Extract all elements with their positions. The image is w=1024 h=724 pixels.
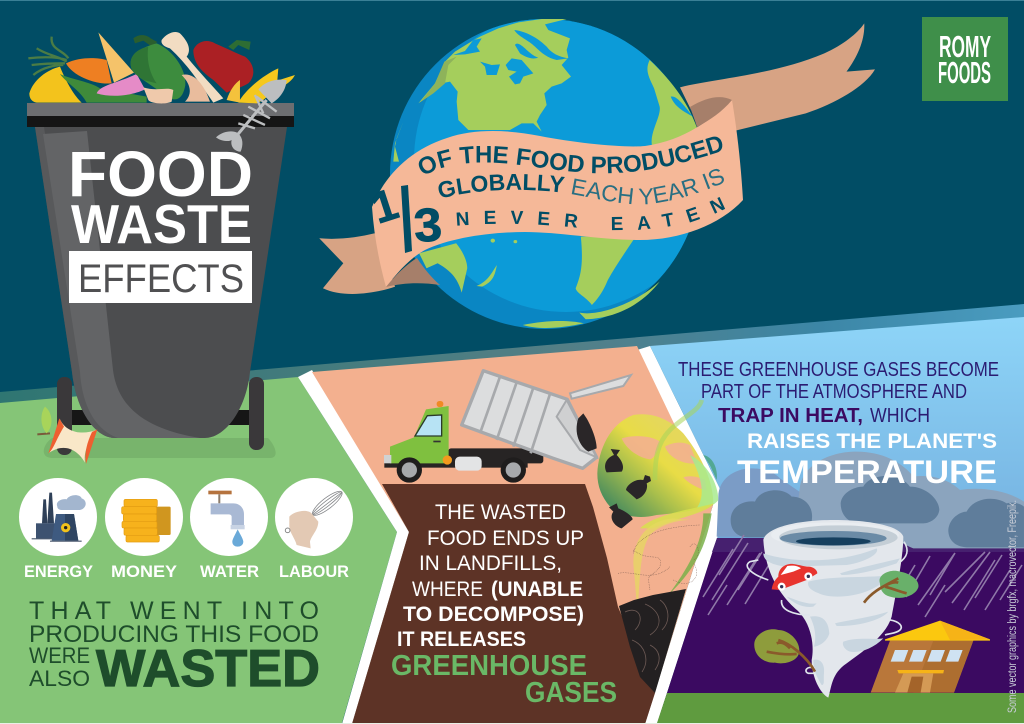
green ground (657, 693, 1024, 723)
ribbon headline: GLOBALLY EACH YEAR IS (438, 168, 724, 204)
icon: labour whisk (275, 478, 353, 556)
icon: olive tree (754, 629, 815, 672)
text: landfill statement: GREENHOUSE (391, 650, 587, 682)
bin lid (27, 103, 294, 116)
credit line: Some vector graphics by brgfx, macrovector, Freepik. (1007, 500, 1019, 713)
icon: house (871, 621, 990, 693)
red pepper (228, 40, 251, 50)
text: landfill statement: IT RELEASES (397, 628, 526, 651)
text: wasted statement: WASTED (96, 640, 320, 698)
truck fuel tank (455, 457, 482, 471)
icon: energy plant (19, 478, 97, 556)
bin body (35, 127, 287, 438)
carrot stems (28, 37, 68, 75)
garbage heap (619, 589, 686, 693)
text: wasted statement: THAT WENT INTO (29, 597, 319, 625)
north america (393, 19, 571, 162)
green pepper (133, 35, 157, 47)
ribbon fraction 1/3: 3 (412, 197, 444, 252)
purple rain field (657, 538, 1024, 724)
title: food waste (68, 138, 253, 255)
falling garbage bags (605, 449, 651, 528)
wheelie bin (27, 103, 294, 458)
text: landfill statement: THE WASTED (435, 501, 566, 524)
bin shadow (44, 438, 276, 458)
bin axle (68, 410, 258, 425)
text: landfill statement: (UNABLE (491, 578, 583, 601)
text: landfill statement: FOOD ENDS UP (427, 527, 584, 550)
text: wasted statement: PRODUCING THIS FOOD (29, 621, 319, 648)
icon labels: MONEY (111, 562, 178, 581)
text: wasted statement: ALSO (29, 666, 90, 691)
smell gas cloud (597, 400, 718, 528)
icon: money coins (105, 478, 183, 556)
landfill flies trails (618, 525, 700, 590)
text: atmosphere statement: RAISES THE PLANET'S (747, 430, 997, 453)
ribbon headline: OF THE FOOD PRODUCED (418, 136, 722, 174)
other continents (419, 60, 698, 328)
apple core (37, 407, 97, 464)
lettuce (60, 74, 147, 103)
text: landfill statement: TO DECOMPOSE) (403, 603, 584, 626)
icon labels: WATER (200, 562, 259, 581)
panel: green resources wasted (0, 377, 397, 723)
container flap (570, 375, 631, 399)
text: landfill statement (391, 501, 617, 709)
tornado scene (747, 520, 990, 698)
icon: water tap (190, 478, 268, 556)
bag leaving container (577, 413, 597, 452)
globe (390, 8, 718, 329)
icon labels: LABOUR (279, 562, 349, 581)
ribbon headline (418, 136, 726, 230)
tornado funnel (763, 520, 903, 698)
landfill mound (352, 484, 655, 724)
text: atmosphere statement: TRAP IN HEAT, (718, 405, 863, 427)
ice cream cone (98, 32, 134, 83)
fish skeleton (216, 80, 287, 152)
yellow pepper (29, 67, 82, 103)
ribbon folds (690, 97, 732, 127)
icon: red car (772, 564, 817, 591)
text: landfill statement: WHERE (412, 578, 483, 601)
food scraps on bin (28, 32, 295, 152)
logo: Romy Foods (922, 17, 1008, 101)
yellow banana (238, 68, 295, 103)
bin wheels (57, 377, 72, 455)
panel: peach landfill (312, 346, 713, 724)
bone (161, 32, 223, 103)
text: atmosphere statement (678, 359, 999, 490)
rain streaks (703, 535, 1022, 617)
panel: sky weather (650, 317, 1024, 724)
tornado swirls (763, 548, 900, 685)
text: landfill statement: GASES (525, 677, 617, 709)
orange carrot (66, 58, 112, 84)
text: atmosphere statement: TEMPERATURE (737, 454, 997, 490)
text: atmosphere statement: WHICH (870, 405, 930, 427)
ribbon fraction 1/3: 1 (366, 179, 404, 234)
icon: green tree (864, 571, 918, 603)
truck cab (390, 406, 449, 463)
text: atmosphere statement: PART OF THE ATMOSPHERE AND (701, 381, 967, 403)
tipping container (462, 371, 597, 468)
storm clouds (717, 452, 1024, 548)
text: wasted statement: WERE (29, 643, 90, 668)
gas plumes from heap (633, 513, 712, 613)
text: landfill statement: IN LANDFILLS, (419, 552, 562, 575)
ribbon back tails (319, 23, 875, 294)
truck chassis (448, 448, 543, 463)
text: wasted statement (29, 597, 320, 698)
tornado mouth (771, 522, 899, 548)
panel: white chevron dividers (298, 346, 728, 724)
tornado debris rings (747, 542, 907, 673)
truck wheels (397, 457, 422, 483)
ribbon headline: NEVER EATEN (456, 197, 726, 230)
garbage truck (384, 371, 631, 483)
icon labels: ENERGY (24, 562, 94, 581)
ribbon front banner (372, 97, 743, 287)
egg shells (143, 87, 173, 103)
ribbon fraction 1/3 (366, 179, 444, 253)
pink ice cream (97, 74, 145, 96)
icon labels (24, 562, 349, 581)
title: food waste: WASTE (71, 193, 252, 255)
bin highlight (43, 131, 200, 438)
title: food waste: FOOD (68, 138, 253, 210)
title: effects box: EFFECTS (78, 257, 244, 301)
